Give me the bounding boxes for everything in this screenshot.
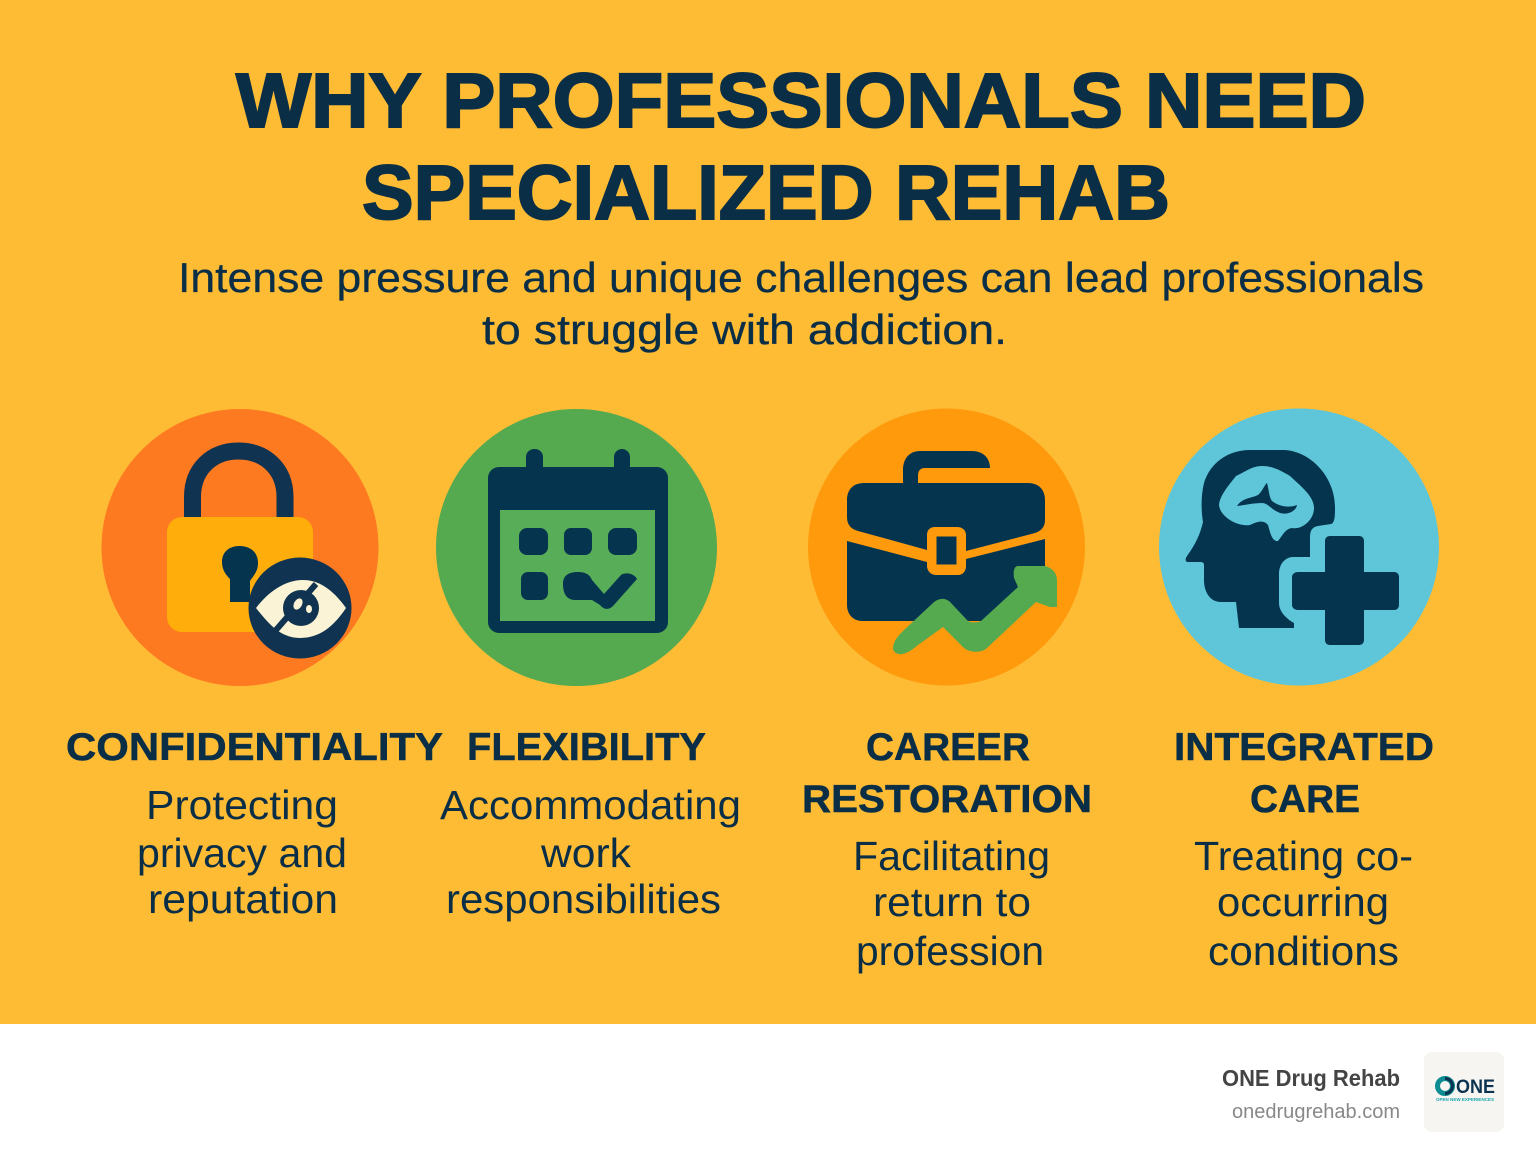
heading: confidentiality: CONFIDENTIALITY: [66, 726, 443, 769]
text: integrated care description: conditions: [1208, 928, 1399, 974]
title: SPECIALIZED REHAB: [362, 150, 1170, 236]
logo: ONE: [1424, 1052, 1504, 1132]
icon: padlock with eye: [102, 409, 378, 686]
text: flexibility description: Accommodating: [440, 782, 741, 828]
heading: career restoration: RESTORATION: [802, 778, 1092, 821]
text: career restoration description: [853, 833, 1050, 974]
heading: integrated care: [1174, 726, 1434, 821]
text: integrated care description: Treating co-: [1194, 833, 1413, 879]
heading: flexibility: FLEXIBILITY: [467, 726, 706, 769]
text: career restoration description: profession: [856, 928, 1044, 974]
subtitle: [178, 254, 1424, 353]
heading: career restoration: CAREER: [866, 726, 1030, 769]
text: confidentiality description: privacy and: [137, 830, 347, 876]
icon: head with brain and medical cross: [1159, 408, 1439, 686]
text: career restoration description: Facilitating: [853, 833, 1050, 879]
text: flexibility description: responsibilities: [446, 876, 721, 922]
text: integrated care description: occurring: [1217, 879, 1389, 925]
heading: integrated care: INTEGRATED: [1174, 726, 1434, 769]
logo: ONE: OPEN NEW EXPERIENCES: [1436, 1097, 1494, 1102]
text: integrated care description: [1194, 833, 1413, 974]
heading: career restoration: [802, 726, 1092, 821]
title: WHY PROFESSIONALS NEED: [236, 58, 1366, 144]
text: confidentiality description: Protecting: [146, 782, 338, 828]
footer brand name: ONE Drug Rehab: [1222, 1065, 1400, 1091]
text: confidentiality description: [137, 782, 347, 922]
subtitle: to struggle with addiction.: [482, 306, 1007, 353]
text: confidentiality description: reputation: [148, 876, 338, 922]
heading: integrated care: CARE: [1250, 778, 1360, 821]
text: career restoration description: return to: [873, 879, 1031, 925]
subtitle: Intense pressure and unique challenges can lead professionals: [178, 254, 1424, 301]
text: flexibility description: work: [540, 830, 632, 876]
title: [236, 58, 1366, 236]
icon: briefcase with rising arrow: [808, 408, 1085, 686]
logo: ONE: ONE: [1456, 1077, 1495, 1098]
footer website: onedrugrehab.com: [1232, 1101, 1400, 1123]
icon: calendar with check: [436, 409, 717, 686]
text: flexibility description: [440, 782, 741, 922]
